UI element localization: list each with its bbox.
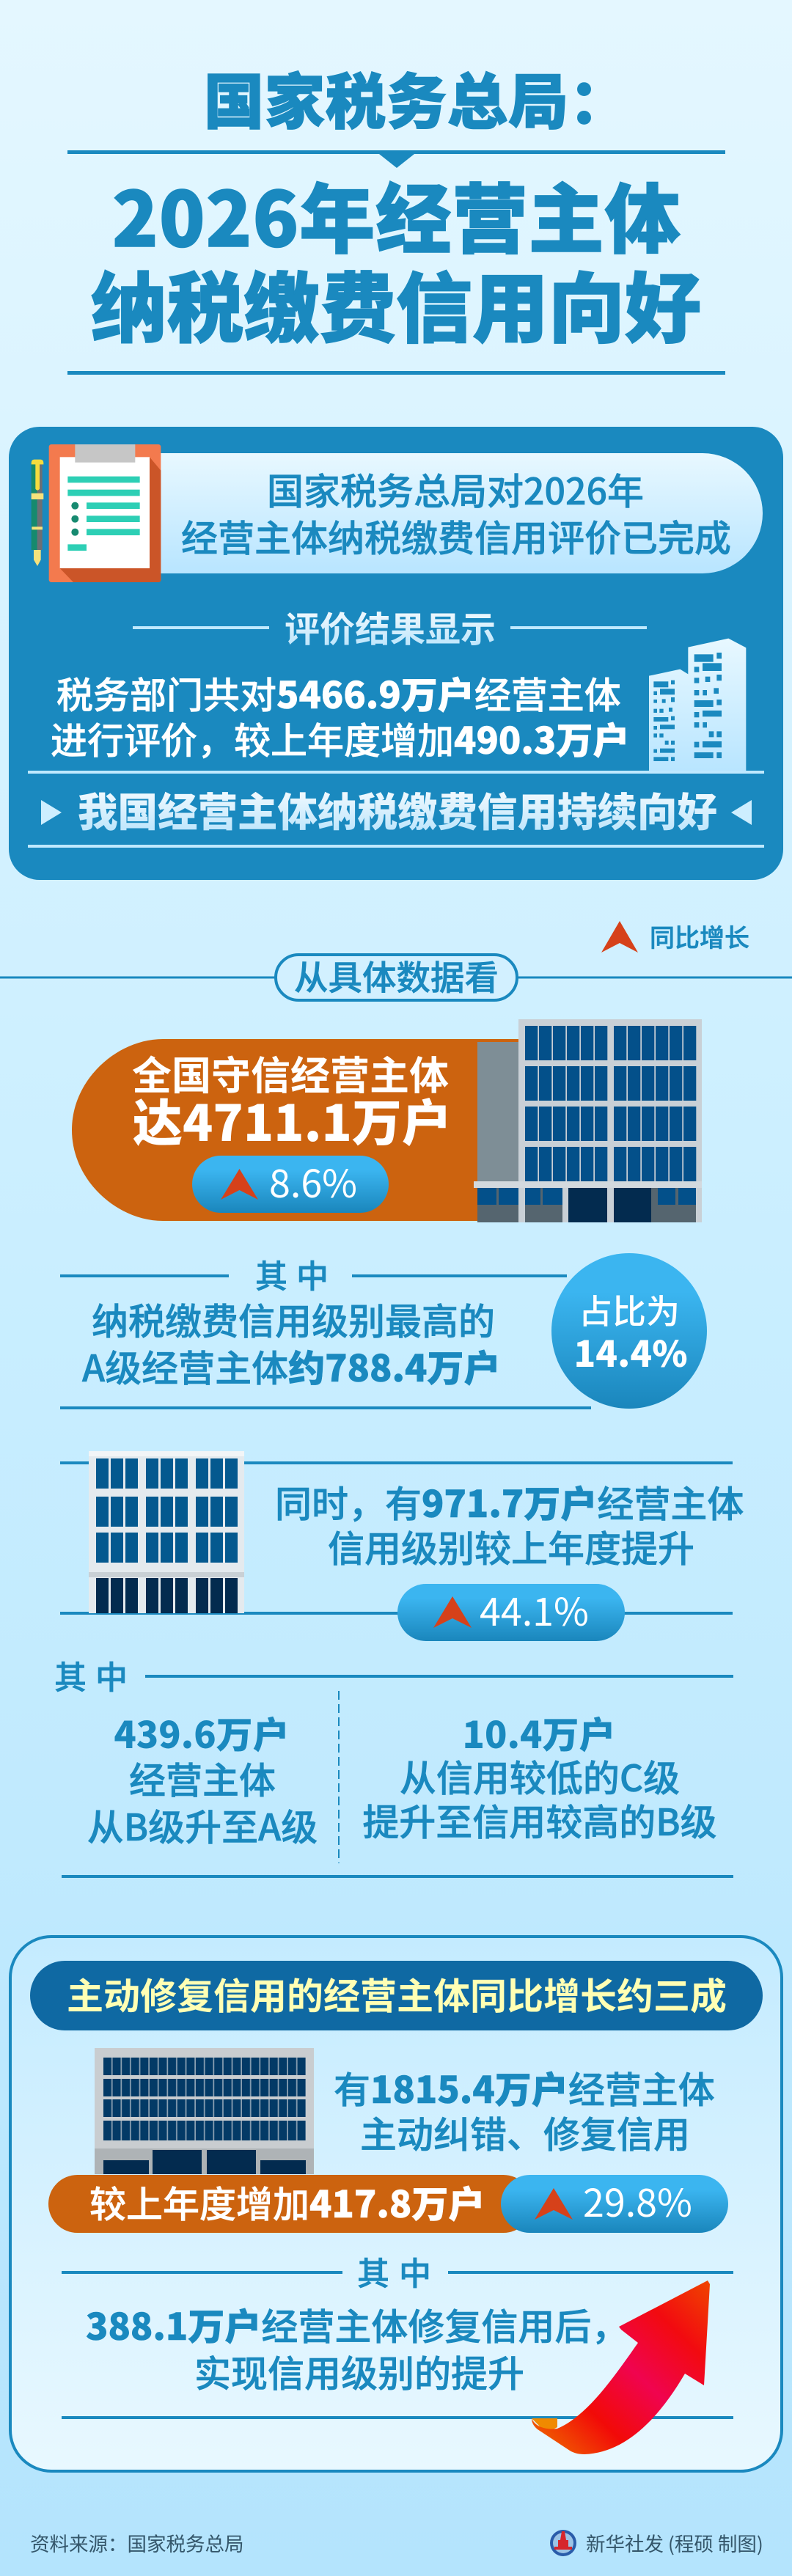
left column: 从B级升至A级 — [87, 1799, 318, 1852]
panel: A-grade businesses: A级经营主体约788.4万户 — [82, 1340, 500, 1392]
panel heading: 主动修复信用的经营主体同比增长约三成 — [67, 1967, 727, 2020]
results text: 税务部门共对5466.9万户经营主体 — [56, 667, 621, 719]
icon: wide building — [95, 2048, 314, 2174]
title divider with pointer — [67, 150, 725, 168]
growth pill 44.1%: 44.1% — [480, 1582, 589, 1637]
icon: white buildings — [649, 639, 746, 772]
right column: 提升至信用较高的B级 — [362, 1794, 717, 1846]
column divider — [338, 1691, 340, 1863]
bottom rule — [62, 1875, 733, 1878]
legend: year-on-year growth: 同比增长 — [650, 918, 749, 954]
subheading: evaluation results — [133, 601, 647, 652]
pointer triangles — [41, 800, 752, 825]
left column: 439.6万户 — [114, 1706, 290, 1759]
title line 2: 2026年经营主体 — [112, 159, 681, 268]
icon: clipboard and pen — [32, 444, 161, 582]
title line 1: 国家税务总局： — [204, 54, 630, 141]
rule: upper — [62, 2271, 733, 2274]
banner text: 国家税务总局对2026年 — [267, 463, 644, 515]
subheading rule — [145, 1675, 733, 1678]
rule: lower — [62, 2416, 733, 2419]
icon: white office block — [89, 1451, 244, 1613]
light banner — [161, 453, 763, 573]
orange increase bar: 较上年度增加417.8万户 — [89, 2176, 485, 2228]
growth pill 8.6% — [192, 1153, 389, 1213]
panel: proactive credit repair — [10, 1937, 782, 2471]
arrow: upward — [532, 2280, 710, 2454]
A-grade text: 纳税缴费信用级别最高的 — [92, 1293, 495, 1346]
conclusion rules — [28, 771, 764, 848]
panel: proactive credit repair: 实现信用级别的提升 — [194, 2345, 524, 2398]
repair upgrade text: 388.1万户经营主体修复信用后， — [86, 2298, 628, 2351]
panel background — [9, 427, 783, 880]
left column: 经营主体 — [129, 1752, 276, 1805]
subheading: 其中 — [54, 1651, 136, 1698]
panel: evaluation summary — [9, 427, 783, 880]
icon: office tower — [474, 1019, 702, 1222]
banner figure: 达4711.1万户 — [133, 1083, 452, 1156]
panel: trustworthy businesses — [72, 1019, 702, 1222]
growth pill 8.6%: 8.6% — [269, 1153, 357, 1208]
right column: 10.4万户 — [463, 1706, 615, 1759]
share circle — [551, 1253, 707, 1409]
panel outline — [10, 1937, 782, 2471]
legend: year-on-year growth — [601, 918, 749, 954]
section heading: by the numbers: 从具体数据看 — [294, 951, 499, 1000]
share circle: 14.4% — [573, 1326, 688, 1378]
subheading: 其中 — [357, 2247, 441, 2294]
conclusion text: 我国经营主体纳税缴费信用持续向好 — [78, 780, 717, 838]
panel: proactive credit repair: 主动纠错、修复信用 — [360, 2106, 690, 2159]
panel: credit upgraded: 信用级别较上年度提升 — [328, 1520, 694, 1573]
icon: Xinhua logo — [550, 2530, 576, 2556]
panel: evaluation summary: 进行评价，较上年度增加490.3万户 — [51, 712, 629, 765]
repair text: 有1815.4万户经营主体 — [334, 2061, 715, 2114]
upgraded text: 同时，有971.7万户经营主体 — [275, 1475, 744, 1528]
panel: credit upgraded — [60, 1451, 744, 1641]
panel: breakdown of upgrades — [54, 1651, 733, 1878]
frame rules — [60, 1461, 733, 1615]
subheading: evaluation results: 评价结果显示 — [285, 601, 496, 652]
orange banner — [72, 1039, 520, 1221]
panel heading — [30, 1961, 763, 2030]
source note: 资料来源：国家税务总局 — [30, 2528, 243, 2557]
growth pill 29.8% — [501, 2173, 728, 2233]
banner heading: 全国守信经营主体 — [132, 1043, 449, 1101]
title — [67, 54, 725, 375]
section heading: by the numbers — [0, 951, 792, 1000]
bottom rule — [60, 1406, 591, 1409]
subheading rule — [60, 1274, 567, 1277]
left column — [87, 1706, 318, 1852]
panel: evaluation summary: 经营主体纳税缴费信用评价已完成 — [181, 510, 731, 562]
right column — [362, 1706, 717, 1846]
subheading: 其中 — [255, 1250, 337, 1297]
growth pill 29.8%: 29.8% — [583, 2173, 692, 2228]
growth pill 44.1% — [397, 1582, 625, 1641]
title bottom rule — [67, 371, 725, 375]
credit: 新华社发 (程硕 制图) — [586, 2528, 763, 2557]
right column: 从信用较低的C级 — [400, 1750, 680, 1802]
share circle: 占比为 — [579, 1285, 680, 1334]
panel: A-grade businesses — [60, 1250, 707, 1409]
title line 3: 纳税缴费信用向好 — [91, 247, 701, 358]
